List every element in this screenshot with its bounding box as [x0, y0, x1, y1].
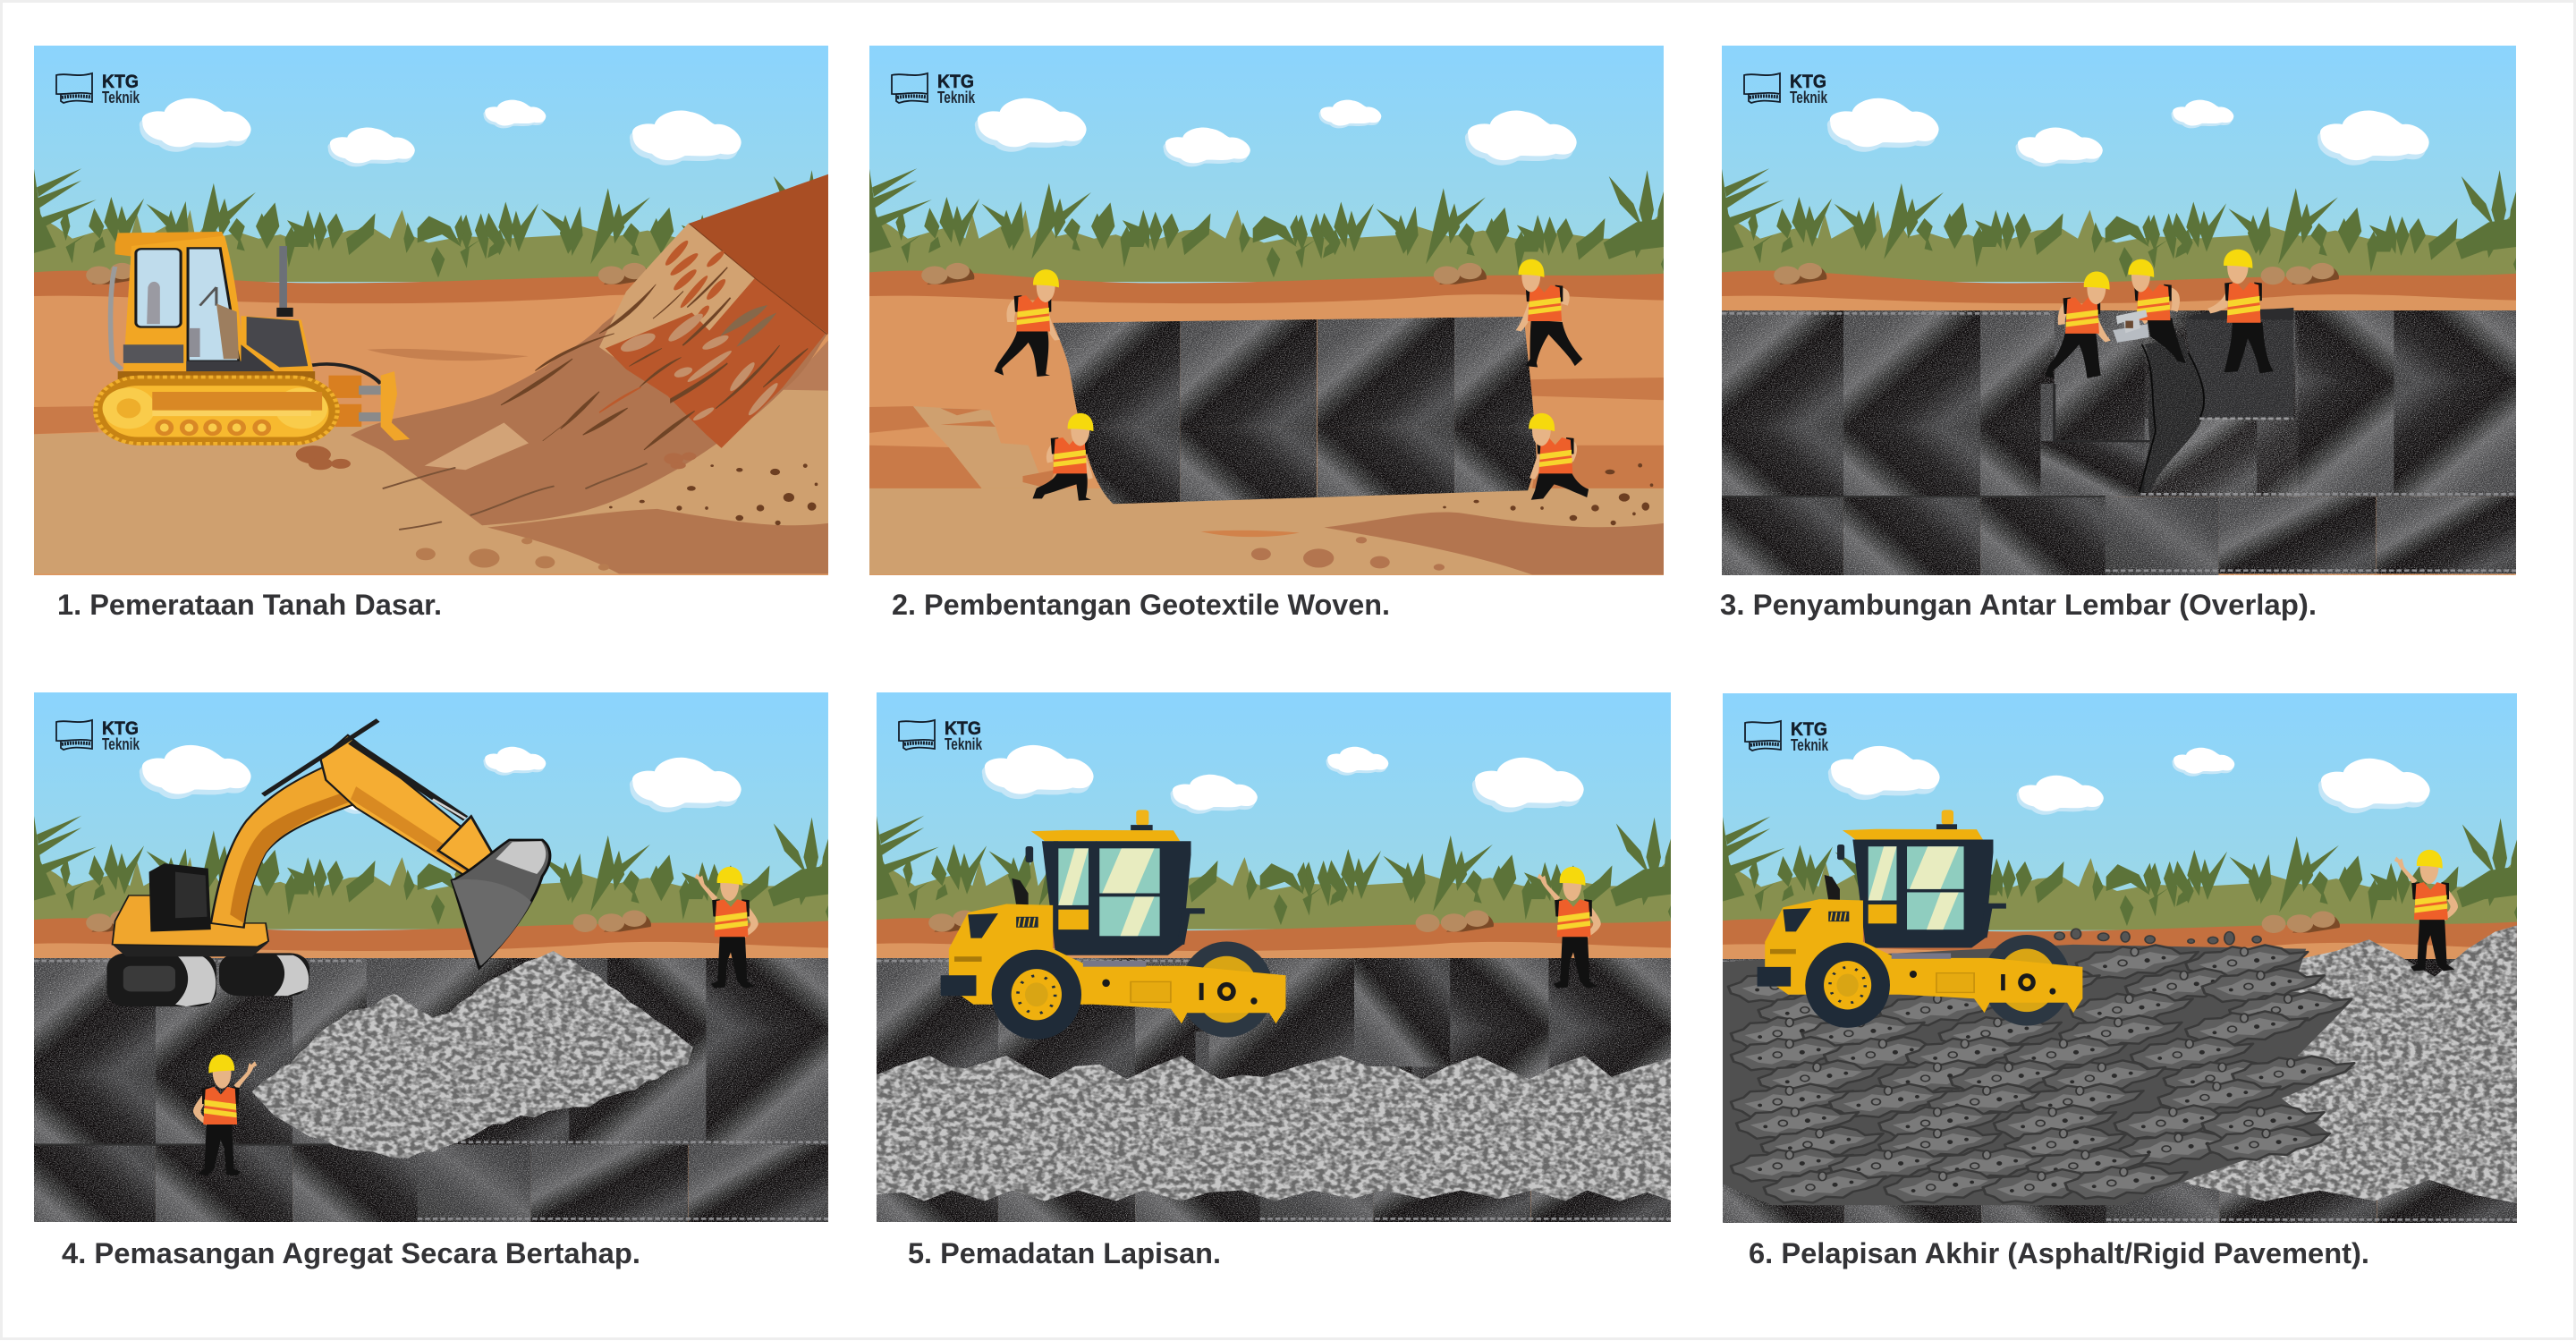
geotextile floor: [19, 912, 828, 1261]
logo subtitle: Teknik: [102, 89, 140, 106]
workers and sewing machine: [2045, 250, 2274, 378]
scene background: [1723, 693, 2555, 1229]
scene background: [1722, 46, 2555, 580]
logo: [899, 718, 981, 750]
logo subtitle: Teknik: [945, 735, 983, 753]
sewing machine: [2113, 310, 2149, 343]
logo icon: [1744, 73, 1780, 103]
logo text: KTG: [102, 72, 139, 92]
worker top right: [1516, 259, 1582, 367]
ground and soil mound: [34, 174, 828, 573]
lifted sheet fold: [2055, 308, 2298, 497]
scene background: [869, 46, 1702, 580]
panel: step 1 levelling the subgrade: [34, 46, 867, 580]
worker right: [2207, 250, 2274, 373]
caption step 3: 3. Penyambungan Antar Lembar (Overlap).: [1720, 589, 2317, 621]
logo icon: [1745, 721, 1781, 751]
geotextile sheet: [1043, 310, 1591, 543]
asphalt layer: [1723, 929, 2354, 1205]
caption step 1: 1. Pemerataan Tanah Dasar.: [57, 589, 442, 621]
logo icon: [56, 720, 92, 750]
logo subtitle: Teknik: [1790, 89, 1828, 106]
panel: step 6 final asphalt or rigid pavement: [1707, 693, 2555, 1262]
caption step 5: 5. Pemadatan Lapisan.: [908, 1237, 1221, 1269]
geotextile floor: [1707, 913, 2517, 1262]
bulldozer: [93, 232, 410, 470]
scene background: [34, 692, 867, 1228]
logo icon: [899, 720, 935, 750]
logo: [56, 718, 139, 750]
scene background: sky, clouds, grass, soil: [34, 46, 867, 580]
logo icon: [56, 73, 92, 103]
logo text: KTG: [1791, 719, 1827, 740]
caption step 2: 2. Pembentangan Geotextile Woven.: [892, 589, 1390, 621]
worker centre: [2128, 259, 2186, 363]
mound detail drawn in crop coordinates: [501, 238, 808, 450]
logo: [56, 72, 139, 103]
geotextile floor: [1722, 267, 2516, 575]
logo text: KTG: [102, 718, 139, 739]
worker with sewing machine left: [2045, 272, 2111, 378]
aggregate layer: [2150, 923, 2522, 1205]
aggregate pile: [241, 945, 701, 1162]
logo text: KTG: [937, 72, 974, 92]
logo: [1744, 72, 1826, 103]
logo: [892, 72, 974, 103]
logo subtitle: Teknik: [1791, 736, 1829, 754]
logo text: KTG: [945, 718, 981, 739]
road roller: [941, 810, 1285, 1040]
worker waving: [1538, 867, 1601, 989]
aggregate layer: [877, 1051, 1672, 1205]
caption step 6: 6. Pelapisan Akhir (Asphalt/Rigid Pavement).: [1749, 1237, 2369, 1269]
road roller: [1758, 810, 2082, 1028]
logo: [1745, 719, 1827, 751]
panel: step 5 compacting the layer: [861, 692, 1709, 1261]
logo text: KTG: [1790, 72, 1826, 92]
panel: step 3 overlapping and sewing sheets: [1722, 46, 2516, 575]
excavator: [106, 720, 550, 1006]
logo subtitle: Teknik: [937, 89, 976, 106]
worker bottom left: [1032, 413, 1093, 501]
worker left: [193, 1055, 257, 1175]
logo subtitle: Teknik: [102, 735, 140, 753]
panel: step 2 spreading the woven geotextile: [869, 46, 1702, 580]
worker waving: [2394, 850, 2458, 972]
caption step 4: 4. Pemasangan Agregat Secara Bertahap.: [62, 1237, 640, 1269]
ground details: [869, 378, 1664, 574]
worker right: [695, 867, 758, 989]
worker top left: [995, 269, 1060, 377]
workers holding the sheet: [995, 259, 1589, 501]
scene background: [877, 692, 1709, 1228]
logo icon: [892, 73, 928, 103]
geotextile floor: [861, 912, 1671, 1261]
worker bottom right: [1529, 413, 1589, 500]
panel: step 4 placing aggregate gradually: [19, 692, 867, 1261]
